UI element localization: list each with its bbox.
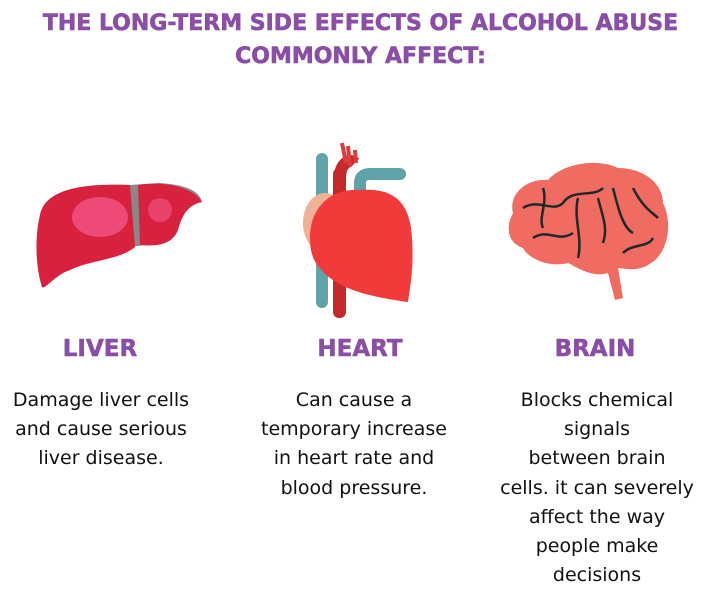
text: heart bbox=[261, 389, 447, 499]
text: liver: liver disease. bbox=[38, 447, 164, 469]
heading: liver: LIVER bbox=[63, 336, 137, 362]
icon: brain bbox=[508, 162, 668, 300]
text: heart: in heart rate and bbox=[274, 447, 434, 469]
text: brain: decisions bbox=[553, 564, 641, 586]
title: COMMONLY AFFECT: bbox=[235, 44, 486, 69]
text: brain: cells. it can severely bbox=[500, 477, 694, 499]
text: brain: affect the way bbox=[529, 506, 665, 528]
text: liver: Damage liver cells bbox=[13, 389, 189, 411]
icon: liver bbox=[36, 183, 202, 288]
text: brain: Blocks chemical bbox=[521, 389, 673, 411]
text: brain bbox=[500, 389, 694, 586]
title bbox=[42, 11, 678, 69]
heading: heart: HEART bbox=[317, 336, 403, 362]
text: heart: temporary increase bbox=[261, 418, 447, 440]
text: liver: and cause serious bbox=[15, 418, 187, 440]
text: brain: people make bbox=[536, 535, 658, 557]
text: heart: blood pressure. bbox=[281, 477, 427, 499]
title: THE LONG-TERM SIDE EFFECTS OF ALCOHOL ABUSE bbox=[43, 11, 678, 36]
text: liver bbox=[13, 389, 189, 469]
icon: heart bbox=[303, 142, 413, 318]
text: brain: signals bbox=[564, 418, 630, 440]
text: heart: Can cause a bbox=[296, 389, 412, 411]
heading: brain: BRAIN bbox=[555, 336, 635, 362]
text: brain: between brain bbox=[528, 447, 666, 469]
